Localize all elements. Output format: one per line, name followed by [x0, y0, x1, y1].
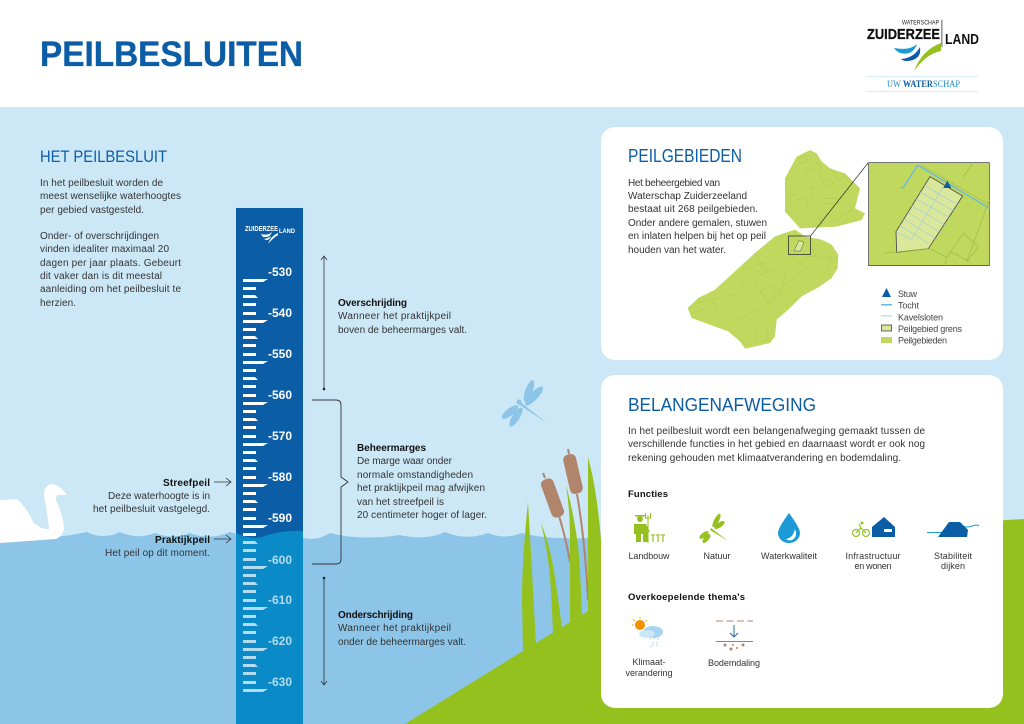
label: waterkwaliteit: Waterkwaliteit [761, 551, 817, 561]
text block: het peilbesluit: Onder- of overschrijdingen [40, 231, 159, 242]
description [628, 178, 767, 256]
text block: het peilbesluit: HET PEILBESLUIT [40, 147, 167, 166]
text: overschrijding: Overschrijding [338, 298, 407, 309]
ruler numbers: -560 [268, 388, 292, 402]
arrow: streefpeil [214, 478, 231, 486]
map inset [869, 163, 989, 266]
description: houden van het water. [628, 245, 726, 256]
description: Het beheergebied van [628, 178, 720, 189]
text block: het peilbesluit [40, 147, 181, 309]
label: infrastructuur en wonen: en wonen [854, 561, 892, 571]
logo: Waterschap Zuiderzeeland: ZUIDERZEE [867, 26, 940, 43]
description [628, 426, 925, 464]
text: beheermarges: De marge waar onder [357, 456, 453, 467]
southern island [688, 230, 838, 349]
ruler logo: LAND [279, 229, 296, 235]
text: overschrijding: boven de beheermarges valt. [338, 325, 467, 336]
heading: PEILGEBIEDEN [628, 146, 742, 166]
ruler ticks above water [243, 279, 268, 536]
description: In het peilbesluit wordt een belangenafweging gemaakt tussen de [628, 426, 925, 437]
text: beheermarges: het praktijkpeil mag afwijken [357, 483, 485, 494]
label: klimaatverandering [626, 657, 672, 678]
logo: Waterschap Zuiderzeeland: LAND [945, 31, 979, 48]
cattails and reeds [522, 449, 601, 652]
description: bestaat uit 268 peilgebieden. [628, 204, 758, 215]
label: infrastructuur en wonen [846, 551, 900, 571]
text: overschrijding: Wanneer het praktijkpeil [338, 311, 451, 322]
header band [0, 0, 1024, 107]
text block: het peilbesluit: per gebied vastgesteld. [40, 205, 144, 216]
ruler ticks below water [243, 541, 268, 692]
label: infrastructuur en wonen: Infrastructuur [846, 551, 900, 561]
panel: peilgebieden [601, 127, 1003, 360]
water level ruler [236, 208, 303, 724]
ruler numbers: -540 [268, 306, 292, 320]
ruler numbers: -620 [268, 634, 292, 648]
map legend: Peilgebieden [898, 336, 947, 346]
icon: waterkwaliteit [778, 513, 800, 543]
label: stabiliteit dijken [934, 551, 972, 571]
heading: BELANGENAFWEGING [628, 395, 816, 415]
label: praktijkpeil [105, 535, 210, 559]
swan [0, 484, 67, 543]
label: praktijkpeil: Het peil op dit moment. [105, 548, 210, 559]
bracket: beheermarges [312, 400, 348, 564]
water-covered part of ruler [236, 531, 303, 724]
panel: belangenafweging [601, 375, 1003, 708]
icon: klimaatverandering [632, 617, 663, 648]
ruler numbers: -570 [268, 429, 292, 443]
label: natuur: Natuur [704, 551, 730, 561]
icon: infrastructuur en wonen [852, 517, 895, 537]
label: klimaatverandering: verandering [626, 668, 672, 678]
text: onderschrijding [338, 610, 466, 648]
description: verschillende functies in het gebied en daarnaast wordt er ook nog [628, 439, 925, 450]
logo: Waterschap Zuiderzeeland: UW WATERSCHAP [887, 79, 960, 89]
icon: stabiliteit dijken [927, 522, 979, 537]
dragonfly [500, 379, 547, 428]
icon: natuur [698, 513, 728, 544]
icon: bodemdaling [716, 621, 753, 650]
text: beheermarges: Beheermarges [357, 443, 426, 454]
text: beheermarges: van het streefpeil is [357, 497, 444, 508]
heading: overkoepelende thema's: Overkoepelende thema's [628, 592, 745, 603]
description: Onder andere gemalen, stuwen [628, 218, 767, 229]
ruler numbers: -530 [268, 265, 292, 279]
description: Waterschap Zuiderzeeland [628, 191, 747, 202]
ruler logo: ZUIDERZEE [245, 226, 278, 233]
logo: Waterschap Zuiderzeeland [867, 20, 979, 92]
text block: het peilbesluit: aanleiding om het peilbesluit te [40, 284, 181, 295]
text block: het peilbesluit: In het peilbesluit worden de [40, 178, 163, 189]
ruler numbers: -600 [268, 553, 292, 567]
label: bodemdaling: Bodemdaling [708, 658, 760, 668]
text: beheermarges: 20 centimeter hoger of lager. [357, 510, 487, 521]
text block: het peilbesluit: meest wenselijke waterhoogtes [40, 191, 181, 202]
text block: het peilbesluit: dagen per jaar plaats. Gebeurt [40, 258, 181, 269]
ruler numbers: -630 [268, 675, 292, 689]
text: onderschrijding: Onderschrijding [338, 610, 413, 621]
map [688, 150, 989, 349]
label: landbouw: Landbouw [628, 551, 670, 561]
ruler numbers [268, 265, 292, 689]
text: overschrijding [338, 298, 467, 336]
ruler numbers: -590 [268, 511, 292, 525]
text: beheermarges: normale omstandigheden [357, 470, 473, 481]
northern island [785, 150, 865, 228]
text: onderschrijding: Wanneer het praktijkpeil [338, 623, 451, 634]
text block: het peilbesluit: herzien. [40, 298, 76, 309]
map locator [788, 163, 868, 254]
text block: het peilbesluit: vinden idealiter maximaal 20 [40, 244, 169, 255]
label: stabiliteit dijken: dijken [941, 561, 965, 571]
map legend: Peilgebied grens [898, 324, 962, 334]
arrow: praktijkpeil [214, 535, 231, 543]
title: PEILBESLUITEN [40, 35, 303, 74]
label: streefpeil [93, 478, 210, 515]
description: en inlaten helpen bij het op peil [628, 231, 766, 242]
icon: landbouw [634, 513, 665, 543]
label: praktijkpeil: Praktijkpeil [155, 535, 210, 546]
text: beheermarges [357, 443, 487, 521]
label: streefpeil: Deze waterhoogte is in [108, 491, 210, 502]
map legend: Tocht [898, 300, 919, 310]
water [0, 532, 620, 724]
map legend: Kavelsloten [898, 312, 943, 322]
label: stabiliteit dijken: Stabiliteit [934, 551, 972, 561]
label: streefpeil: het peilbesluit vastgelegd. [93, 504, 210, 515]
arrow: onderschrijding range [321, 577, 327, 685]
label: streefpeil: Streefpeil [163, 478, 210, 489]
map legend: Stuw [898, 289, 918, 299]
arrow: overschrijding range [321, 256, 327, 390]
ruler numbers: -580 [268, 470, 292, 484]
ruler logo [245, 226, 296, 244]
description: rekening gehouden met klimaatverandering en bodemdaling. [628, 453, 901, 464]
heading: functies: Functies [628, 489, 668, 500]
ruler numbers: -550 [268, 347, 292, 361]
ruler numbers: -610 [268, 593, 292, 607]
grass hill [405, 519, 1024, 724]
map legend [881, 288, 962, 346]
text block: het peilbesluit: dit vaker dan is dit meestal [40, 271, 162, 282]
label: klimaatverandering: Klimaat- [632, 657, 666, 667]
logo: Waterschap Zuiderzeeland: WATERSCHAP [902, 20, 939, 26]
text: onderschrijding: onder de beheermarges valt. [338, 637, 466, 648]
